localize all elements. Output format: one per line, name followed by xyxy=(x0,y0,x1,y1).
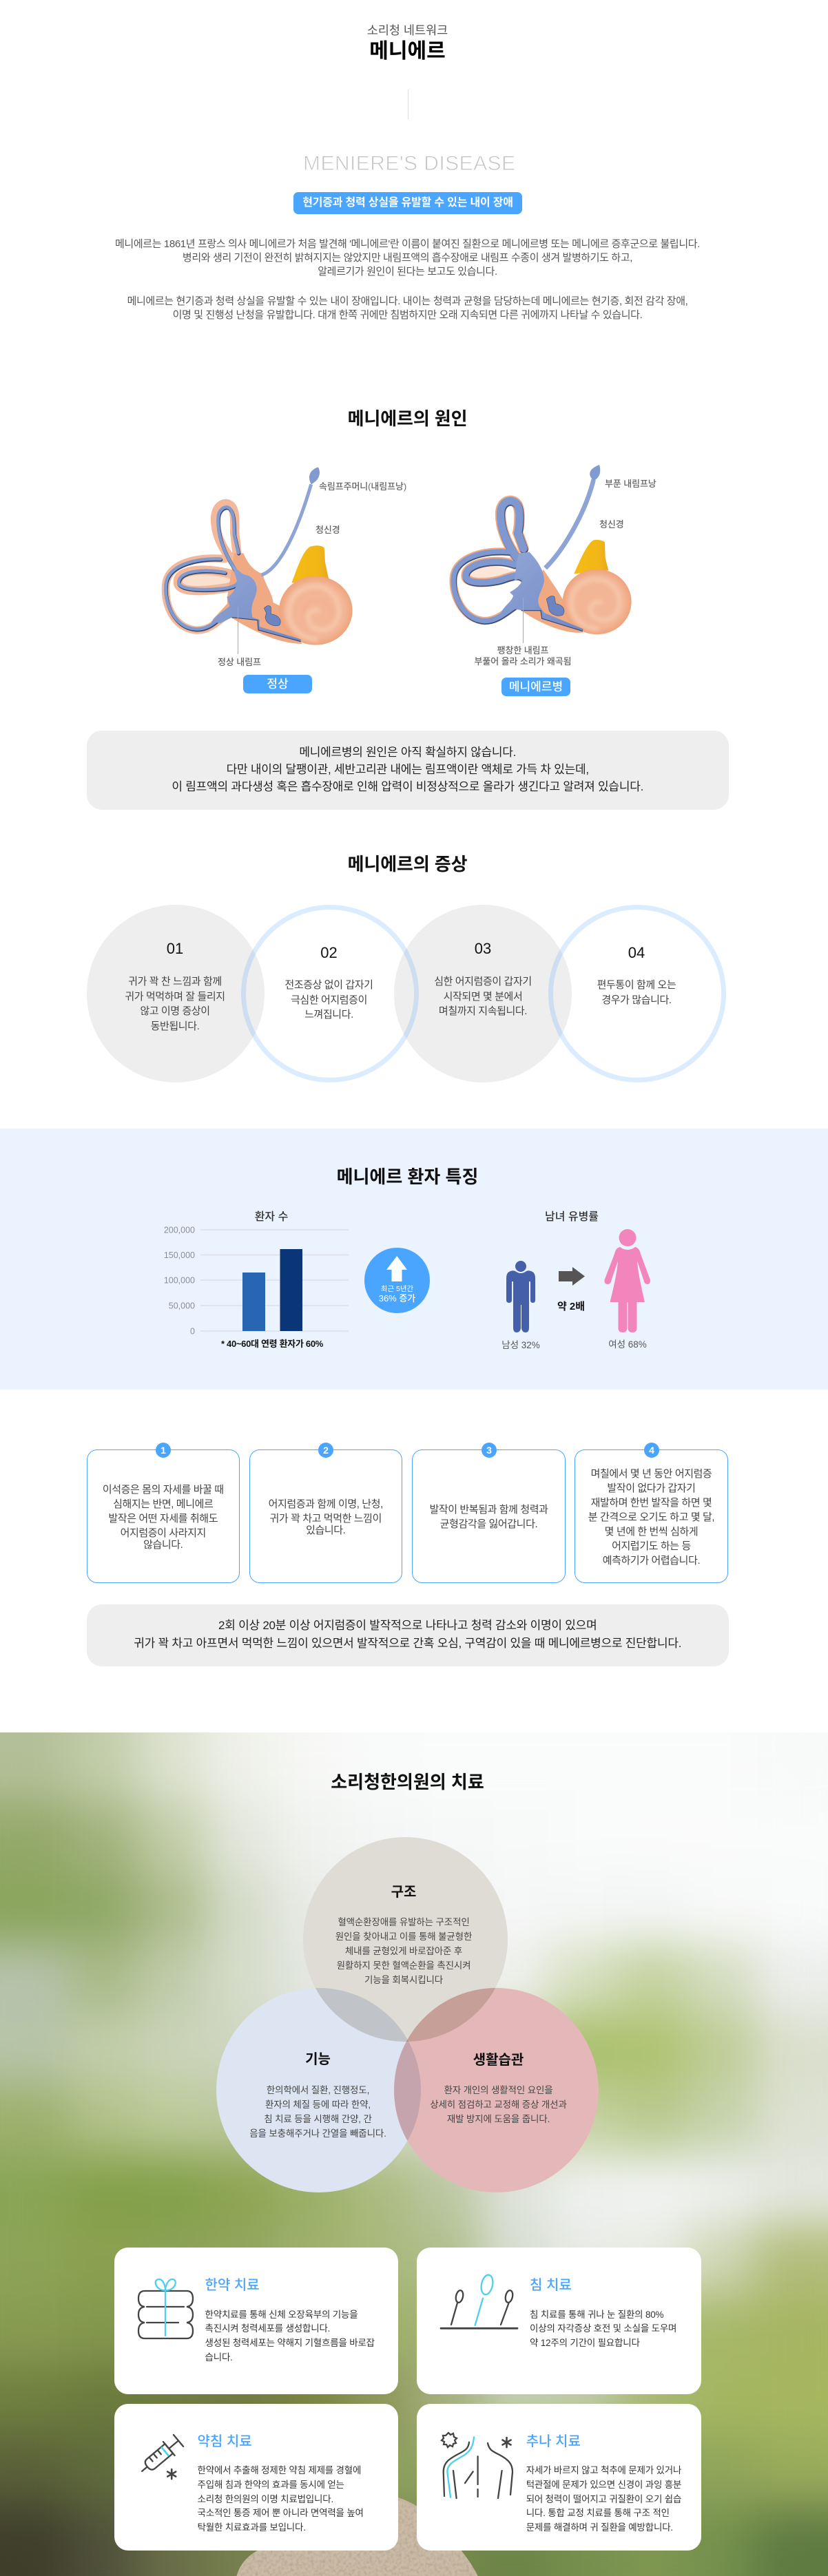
label: 팽창한 내림프: 부풀어 올라 소리가 왜곡됨 xyxy=(474,656,572,667)
venn circle: lifestyle xyxy=(394,1988,599,2192)
venn text: 기능: 환자의 체질 등에 따라 한약, xyxy=(265,2099,371,2110)
description xyxy=(530,2310,676,2348)
venn text: 기능: 한의학에서 질환, 진행정도, xyxy=(267,2085,369,2095)
venn text: 구조: 체내를 균형있게 바로잡아준 후 xyxy=(345,1946,462,1956)
venn text: 기능: 침 치료 등을 시행해 간양, 간 xyxy=(264,2114,372,2124)
card 3 xyxy=(412,1449,565,1583)
venn text: 기능: 음을 보충해주거나 간열을 빼줍니다. xyxy=(249,2128,386,2139)
venn title: 구조: 구조 xyxy=(391,1885,416,1900)
badge text: 최근 5년간 xyxy=(381,1285,413,1293)
circle 02 xyxy=(241,905,419,1082)
treatment card: acupuncture xyxy=(417,2248,701,2394)
badge text xyxy=(379,1285,415,1303)
card text 1: 이석증은 몸의 자세를 바꿀 때 xyxy=(103,1483,224,1496)
venn text: 구조: 혈액순환장애를 유발하는 구조적인 xyxy=(338,1917,470,1927)
label: 정상 내림프: 정상 내림프 xyxy=(218,657,261,667)
bar chart: 0 xyxy=(190,1326,195,1336)
main title: 메니에르 xyxy=(369,40,446,63)
icon: needles xyxy=(439,2274,518,2329)
chart note: * 40~60대 연령 환자가 60% xyxy=(221,1339,323,1349)
venn text: 생활습관: 재발 방지에 도움을 줍니다. xyxy=(447,2114,550,2124)
bar chart: 150,000 xyxy=(164,1250,195,1260)
description: 탁월한 치료효과를 보입니다. xyxy=(197,2522,306,2533)
venn text: 구조: 원인을 찾아내고 이를 통해 불균형한 xyxy=(335,1931,472,1942)
text 03: 며칠까지 지속됩니다. xyxy=(439,1005,527,1017)
description: 약 12주의 기간이 필요합니다 xyxy=(530,2338,640,2348)
title: 한약 치료 xyxy=(205,2278,260,2293)
card text 3 xyxy=(429,1504,548,1530)
description: 습니다. xyxy=(205,2352,233,2363)
description: 한약에서 추출해 정제한 약침 제제를 경혈에 xyxy=(197,2465,361,2475)
title: 추나 치료 xyxy=(526,2434,581,2449)
badge 3: 3 xyxy=(486,1445,492,1456)
text 01: 귀가 먹먹하며 잘 들리지 xyxy=(125,991,225,1003)
intro paragraph 1 xyxy=(115,238,700,278)
card text 1: 발작은 어떤 자세를 취해도 xyxy=(108,1512,218,1525)
bar chart xyxy=(164,1226,349,1336)
intro paragraph 2 xyxy=(127,295,687,321)
card text 4: 몇 년에 한 번씩 심하게 xyxy=(605,1526,698,1537)
background photo: blurred foliage xyxy=(0,1732,828,2576)
treatment card: pharmacopuncture xyxy=(114,2404,398,2551)
number 03: 03 xyxy=(475,940,491,957)
callout: diagnosis: 2회 이상 20분 이상 어지럼증이 발작적으로 나타나고 청력 감소와 이명이 있으며 xyxy=(218,1619,597,1632)
card text 4: 분 간격으로 오기도 하고 몇 달, xyxy=(588,1511,714,1523)
intro paragraph 1: 알레르기가 원인이 된다는 보고도 있습니다. xyxy=(318,266,497,278)
venn text: 구조: 기능을 회복시킵니다 xyxy=(364,1975,443,1985)
text 01: 귀가 꽉 찬 느낌과 함께 xyxy=(128,976,222,987)
button: 정상 xyxy=(243,675,312,693)
callout: cause summary: 메니에르병의 원인은 아직 확실하지 않습니다. xyxy=(299,746,516,759)
badge 3 xyxy=(482,1443,497,1458)
venn title: 생활습관: 생활습관 xyxy=(473,2053,524,2068)
label: 속림프주머니: 속림프주머니(내림프낭) xyxy=(319,481,406,492)
description: 주입해 침과 한약의 효과를 동시에 얻는 xyxy=(197,2480,344,2490)
callout: cause summary: 이 림프액의 과다생성 혹은 흡수장애로 인해 압력이 비정상적으로 올라가 생긴다고 알려져 있습니다. xyxy=(172,780,643,793)
symptom circles xyxy=(87,905,726,1082)
venn circle: structure xyxy=(303,1837,508,2042)
card text 2: 어지럼증과 함께 이명, 난청, xyxy=(269,1498,383,1509)
text 01: 않고 이명 증상이 xyxy=(140,1005,210,1017)
icon: arrow right xyxy=(559,1267,585,1286)
text 02: 느껴집니다. xyxy=(304,1009,353,1020)
card text 4: 며칠에서 몇 년 동안 어지럼증 xyxy=(591,1468,712,1479)
card text 3: 균형감각을 잃어갑니다. xyxy=(440,1518,537,1530)
card text 4: 예측하기가 어렵습니다. xyxy=(603,1555,700,1566)
icon: back posture xyxy=(440,2432,514,2500)
venn text: 생활습관 xyxy=(430,2085,567,2124)
title: 침 치료 xyxy=(530,2278,572,2293)
card text 1: 않습니다. xyxy=(143,1538,183,1551)
text 03 xyxy=(434,976,532,1017)
card text 1 xyxy=(103,1483,224,1551)
callout: cause summary: 다만 내이의 달팽이관, 세반고리관 내에는 림프액이란 액체로 가득 차 있는데, xyxy=(227,763,589,776)
card text 4: 재발하며 한번 발작을 하면 몇 xyxy=(591,1497,712,1508)
text 02: 극심한 어지럼증이 xyxy=(291,994,367,1006)
venn title: 기능: 기능 xyxy=(305,2052,331,2067)
heading: treatment: 소리청한의원의 치료 xyxy=(331,1772,484,1792)
description: 한약치료를 통해 신체 오장육부의 기능을 xyxy=(205,2310,358,2320)
badge 2: 2 xyxy=(323,1445,329,1456)
icon: up arrow xyxy=(386,1256,407,1281)
text 03: 시작되면 몇 분에서 xyxy=(444,991,522,1003)
description: 국소적인 통증 제어 뿐 아니라 면역력을 높여 xyxy=(197,2508,364,2518)
treatment card: chuna xyxy=(417,2404,701,2551)
badge text: 36% 증가 xyxy=(379,1293,415,1303)
venn diagram xyxy=(216,1837,599,2192)
badge 1 xyxy=(156,1443,171,1458)
badge 4 xyxy=(644,1443,659,1458)
button: 정상: 정상 xyxy=(267,678,289,691)
text 03: 심한 어지럼증이 갑자기 xyxy=(434,976,532,987)
number 04: 04 xyxy=(628,944,645,961)
header eyebrow: 소리청 네트워크: 소리청 네트워크 xyxy=(367,23,448,37)
label: 부푼 내림프낭: 부푼 내림프낭 xyxy=(605,479,656,489)
description: 침 치료를 통해 귀나 눈 질환의 80% xyxy=(530,2310,663,2320)
intro paragraph 1: 메니에르는 1861년 프랑스 의사 메니에르가 처음 발견해 '메니에르'란 이름이 붙여진 질환으로 메니에르병 또는 메니에르 증후군으로 불립니다. xyxy=(115,238,700,250)
circle 03 xyxy=(394,905,572,1082)
description: 턱관절에 문제가 있으면 신경이 과잉 흥분 xyxy=(526,2480,681,2490)
icon: syringe xyxy=(141,2433,185,2480)
card 4 xyxy=(575,1449,727,1583)
panel: patient characteristics xyxy=(0,1129,828,1390)
card 1 xyxy=(87,1449,240,1583)
text 02 xyxy=(284,979,373,1020)
description: 니다. 통합 교정 치료를 통해 구조 적인 xyxy=(526,2508,670,2518)
description xyxy=(526,2465,681,2533)
label: 팽창한 내림프: 팽창한 내림프 xyxy=(497,645,548,656)
english decorative title: MENIERE'S DISEASE xyxy=(303,152,515,175)
card text 4: 발작이 없다가 갑자기 xyxy=(607,1482,696,1494)
card text 3: 발작이 반복됨과 함께 청력과 xyxy=(429,1504,548,1515)
icon: male figure xyxy=(506,1261,535,1332)
badge: subtitle xyxy=(293,192,522,214)
venn text: 기능 xyxy=(249,2085,386,2139)
card text 4 xyxy=(588,1468,714,1566)
label: female 68%: 여성 68% xyxy=(608,1339,647,1350)
illustration: normal inner ear xyxy=(161,467,353,645)
icon: herbal package xyxy=(138,2278,194,2340)
description: 문제를 해결하며 귀 질환을 예방합니다. xyxy=(526,2522,673,2533)
card text 2: 귀가 꽉 차고 먹먹한 느낌이 xyxy=(270,1512,382,1525)
label: male 32%: 남성 32% xyxy=(501,1340,540,1350)
callout: diagnosis xyxy=(87,1604,729,1666)
description xyxy=(205,2310,375,2363)
description: 생성된 청력세포는 약해지 기혈흐름을 바로잡 xyxy=(205,2338,375,2348)
badge 4: 4 xyxy=(649,1445,654,1456)
card text 1: 심해지는 반면, 메니에르 xyxy=(113,1498,213,1509)
card text 2 xyxy=(269,1498,383,1536)
title: 약침 치료 xyxy=(197,2434,252,2449)
number 02: 02 xyxy=(320,944,338,961)
card text 2: 있습니다. xyxy=(306,1525,345,1536)
circle 04 xyxy=(548,905,726,1082)
heading: 메니에르 환자 특징 xyxy=(337,1166,478,1187)
label: 청신경 normal: 청신경 xyxy=(315,525,340,535)
circle 01 xyxy=(87,905,265,1082)
badge 1: 1 xyxy=(161,1445,166,1456)
description: 되어 청력이 떨어지고 귀질환이 오기 쉽습 xyxy=(526,2494,681,2504)
number 01: 01 xyxy=(167,940,183,957)
venn text: 생활습관: 상세히 점검하고 교정해 증상 개선과 xyxy=(430,2099,567,2110)
badge 2 xyxy=(318,1443,333,1458)
treatment card: herbal xyxy=(114,2248,398,2394)
text 01: 동반됩니다. xyxy=(151,1020,199,1032)
venn text: 생활습관: 환자 개인의 생활적인 요인을 xyxy=(444,2085,553,2095)
badge: subtitle: 현기증과 청력 상실을 유발할 수 있는 내이 장애 xyxy=(302,197,513,209)
venn text: 구조 xyxy=(335,1917,472,1985)
venn circle: function xyxy=(216,1988,421,2192)
card text 1: 어지럼증이 사라지지 xyxy=(121,1527,206,1538)
label: 청신경 meniere: 청신경 xyxy=(599,519,624,530)
description: 소리청 한의원의 이명 치료법입니다. xyxy=(197,2494,333,2504)
venn text: 구조: 원활하지 못한 혈액순환을 촉진시켜 xyxy=(337,1960,470,1971)
bar chart: 50,000 xyxy=(169,1301,195,1311)
intro paragraph 2: 메니에르는 현기증과 청력 상실을 유발할 수 있는 내이 장애입니다. 내이는 청력과 균형을 담당하는데 메니에르는 현기증, 회전 감각 장애, xyxy=(127,295,687,307)
text 01 xyxy=(125,976,225,1032)
callout: cause summary xyxy=(87,731,729,810)
text 04: 경우가 많습니다. xyxy=(601,994,672,1006)
bar chart: 200,000 xyxy=(164,1226,195,1235)
chart title: 환자 수 xyxy=(255,1211,288,1223)
text 04 xyxy=(597,979,676,1006)
badge: 36% increase xyxy=(364,1248,430,1312)
label: 팽창한 내림프 xyxy=(474,645,572,667)
intro paragraph 1: 병리와 생리 기전이 완전히 밝혀지지는 않았지만 내림프액의 흡수장애로 내림프 수종이 생겨 발병하기도 하고, xyxy=(183,252,632,264)
description: 촉진시켜 청력세포를 생성합니다. xyxy=(205,2323,330,2334)
text 02: 전조증상 없이 갑자기 xyxy=(284,979,373,991)
bar chart: 100,000 xyxy=(164,1275,195,1285)
description: 자세가 바르지 않고 척추에 문제가 있거나 xyxy=(526,2465,681,2475)
heading: causes: 메니에르의 원인 xyxy=(348,408,467,429)
icon: female figure xyxy=(604,1229,650,1332)
text 04: 편두통이 함께 오는 xyxy=(597,979,676,991)
button: 메니에르병 xyxy=(501,678,570,696)
card 2 xyxy=(249,1449,402,1583)
label: about double: 약 2배 xyxy=(557,1301,585,1312)
button: 메니에르병: 메니에르병 xyxy=(509,680,563,693)
callout: diagnosis: 귀가 꽉 차고 아프면서 먹먹한 느낌이 있으면서 발작적으로 간혹 오심, 구역감이 있을 때 메니에르병으로 진단합니다. xyxy=(134,1637,681,1650)
description xyxy=(197,2465,364,2533)
description: 이상의 자각증상 호전 및 소실을 도우며 xyxy=(530,2323,676,2334)
heading: symptoms: 메니에르의 증상 xyxy=(348,854,467,875)
illustration: meniere inner ear xyxy=(449,465,632,635)
card text 4: 어지럽기도 하는 등 xyxy=(612,1540,691,1552)
chart title: gender: 남녀 유병률 xyxy=(545,1211,599,1223)
intro paragraph 2: 이명 및 진행성 난청을 유발합니다. 대개 한쪽 귀에만 침범하지만 오래 지속되면 다른 귀에까지 나타날 수 있습니다. xyxy=(173,309,642,321)
